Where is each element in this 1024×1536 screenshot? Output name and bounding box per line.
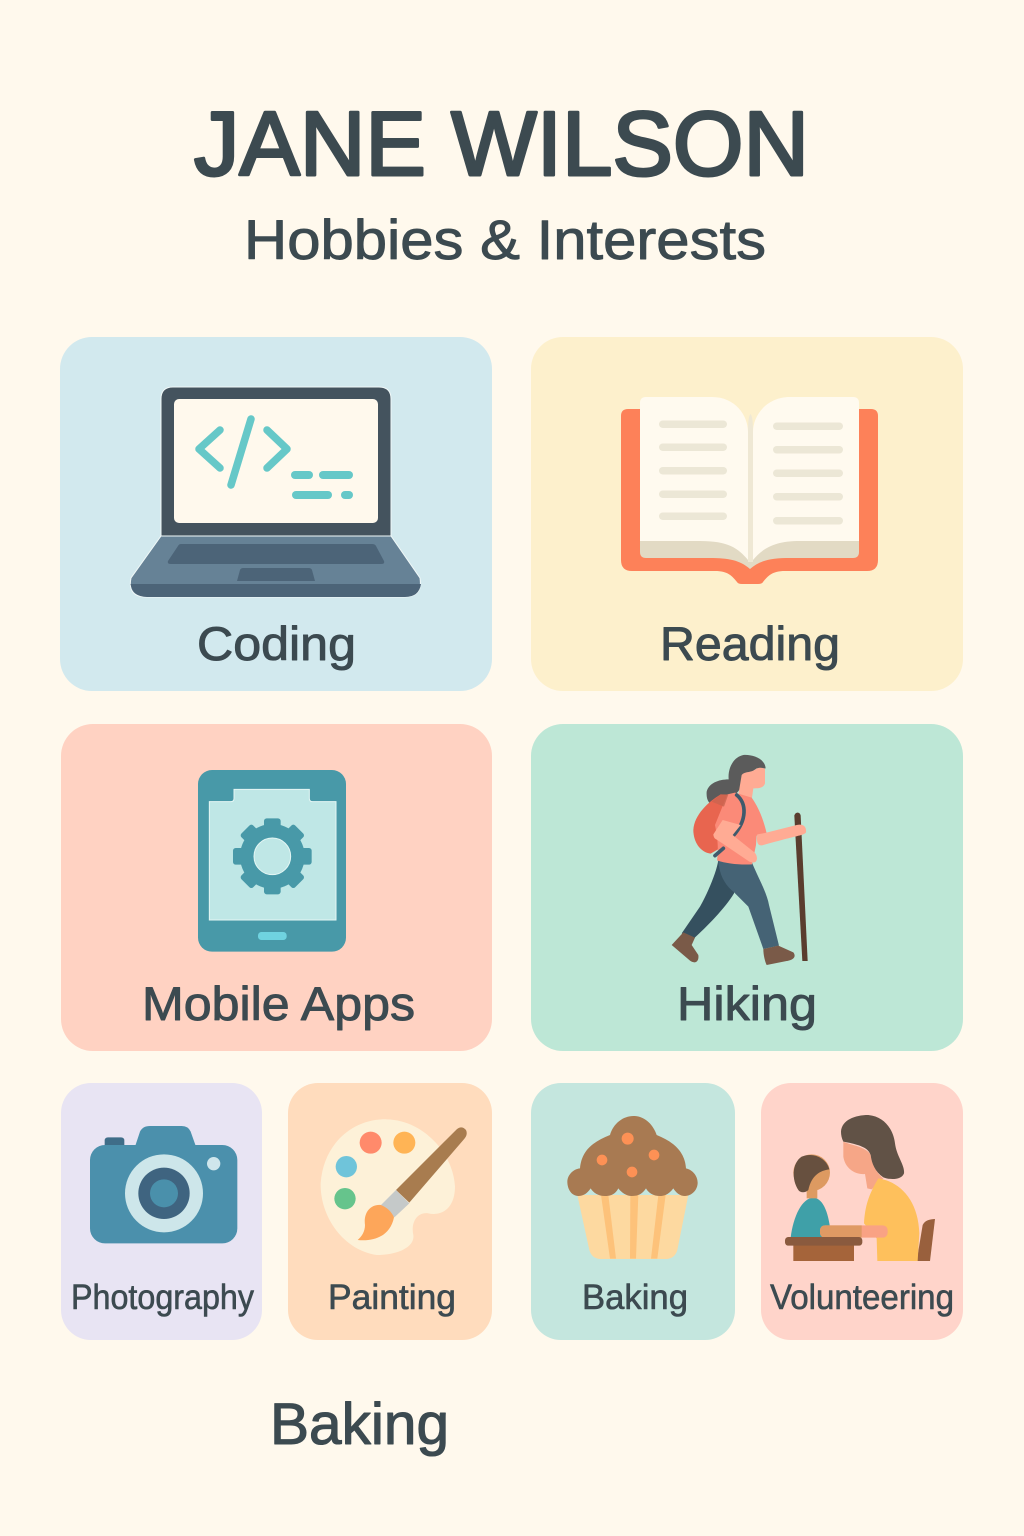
- icon: tablet with gear: [198, 770, 346, 952]
- icon: camera: [90, 1126, 237, 1243]
- label: painting: Painting: [328, 1278, 456, 1317]
- label: reading: Reading: [660, 617, 840, 670]
- panel: mobile apps: [61, 724, 492, 1051]
- label: volunteering: Volunteering: [770, 1278, 954, 1317]
- icon: adult helping child: [785, 1115, 935, 1261]
- panel: volunteering: [761, 1083, 963, 1340]
- panel: reading: [531, 337, 963, 691]
- icon: laptop: [130, 387, 421, 597]
- icon: open book: [621, 397, 878, 584]
- icon: palette and brush: [321, 1119, 467, 1255]
- label: baking: Baking: [582, 1278, 688, 1317]
- panel: hiking: [531, 724, 963, 1051]
- label: coding: Coding: [197, 617, 356, 670]
- stray label: baking: Baking: [270, 1392, 449, 1457]
- panel: photography: [61, 1083, 262, 1340]
- label: photography: Photography: [71, 1278, 254, 1317]
- label: hiking: Hiking: [677, 977, 817, 1030]
- icon: hiker: [672, 755, 808, 965]
- label: mobile apps: Mobile Apps: [142, 977, 415, 1030]
- subtitle: Hobbies & Interests: [244, 208, 766, 271]
- icon: cupcake: [567, 1116, 698, 1259]
- panel: painting: [288, 1083, 492, 1340]
- title: JANE WILSON: [194, 94, 809, 195]
- panel: coding: [60, 337, 492, 691]
- panel: baking: [531, 1083, 735, 1340]
